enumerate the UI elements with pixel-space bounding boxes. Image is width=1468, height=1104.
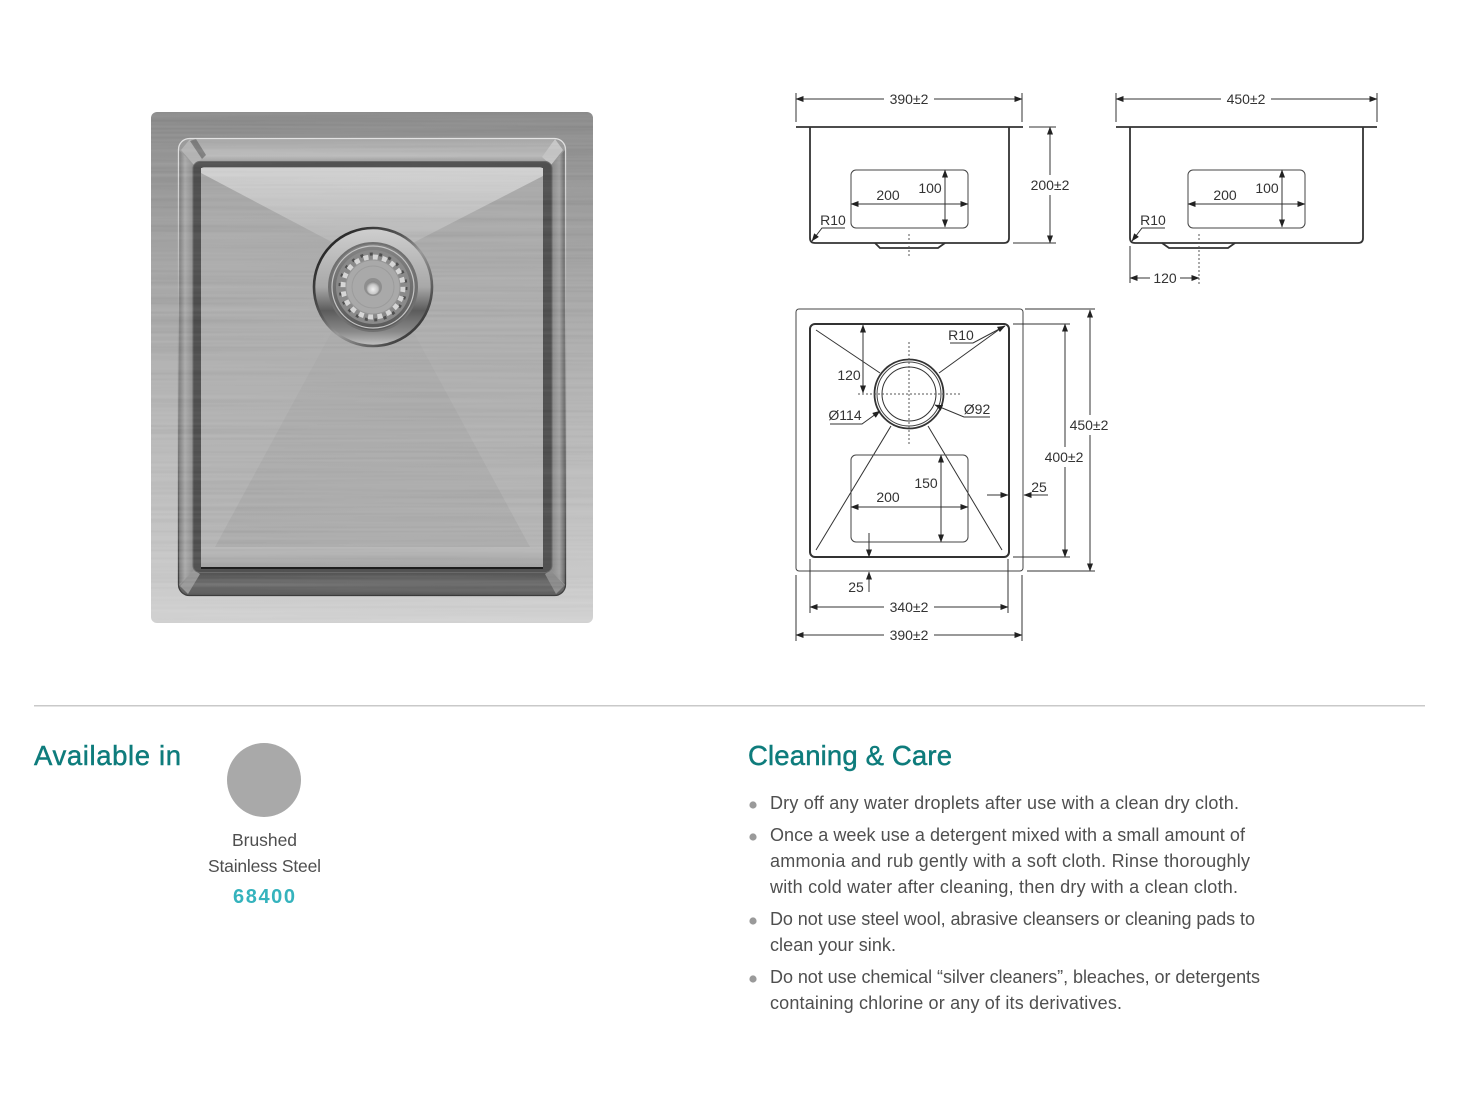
sink bowl sloped walls [178,138,566,596]
flange outline [796,309,1023,571]
rear panel rectangle with dimensions: 100 [918,180,942,196]
length dimension 450 [1025,309,1109,571]
overall width dimension 390: 390±2 [890,627,929,643]
product photo: stainless steel sink top view [151,112,593,623]
bullet 4: Do not use chemical “silver cleaners”, bleaches, or detergents [770,967,1260,987]
bullet 2: with cold water after cleaning, then dry with a clean cloth. [769,877,1238,897]
care instructions list [749,793,1260,1013]
bowl width dimension 340 [810,559,1008,615]
waste outlet [875,243,945,248]
bullet 2: Once a week use a detergent mixed with a small amount of [770,825,1246,845]
technical drawing: plan view [796,309,1109,643]
bullet 2: ammonia and rub gently with a soft cloth. Rinse thoroughly [770,851,1250,871]
brushed steel texture [179,320,194,321]
bowl outline [810,324,1009,557]
swatch name [208,830,321,876]
label diameter 114 [828,407,880,424]
waste outlet [1162,243,1235,248]
offset dimension 120: 120 [1153,270,1177,286]
sink flange [151,112,593,623]
length dimension 450: 450±2 [1070,417,1109,433]
rear panel rectangle with dimensions: 100 [1255,180,1279,196]
product code: 68400 [233,886,295,908]
label diameter 92: Ø92 [964,401,990,417]
sink basin floor with drain falls [193,162,552,572]
right margin 25: 25 [1031,479,1047,495]
R10 corner label [1132,212,1166,241]
R10 corner label: R10 [1140,212,1166,228]
R10 corner label: R10 [820,212,846,228]
height dimension 200: 200±2 [1031,177,1070,193]
technical drawing: side elevation [1116,91,1377,286]
bullet 4: containing chlorine or any of its derivatives. [770,993,1122,1013]
drain offset 120 [837,325,863,393]
finish swatch: brushed stainless steel [208,743,321,908]
sink profile [1116,127,1377,243]
bottom margin 25 [848,533,869,595]
width dimension 450: 450±2 [1227,91,1266,107]
drain circles [858,342,961,445]
label R10 [948,326,1005,343]
rear panel rectangle with dimensions [1188,170,1305,228]
height dimension 200 [1013,127,1070,243]
right margin 25 [987,479,1048,495]
technical drawing: front elevation [796,91,1070,258]
divider [34,705,1425,706]
bullet 3: clean your sink. [770,935,896,955]
lower panel rectangle with dimensions [851,455,968,542]
swatch disc [227,743,301,817]
heading: available in: Available in [34,740,181,771]
drain and strainer basket [314,228,432,346]
rear panel rectangle with dimensions [851,170,968,228]
rear panel rectangle with dimensions: 200 [876,187,900,203]
heading: cleaning and care: Cleaning & Care [748,740,952,771]
bullet 3: Do not use steel wool, abrasive cleansers or cleaning pads to [770,909,1255,929]
label diameter 92 [935,401,990,417]
overall width dimension 390 [796,575,1022,643]
bullet 1: Dry off any water droplets after use with a clean dry cloth. [770,793,1239,813]
drain offset 120: 120 [837,367,861,383]
label R10: R10 [948,327,974,343]
R10 corner label [812,212,846,241]
bullet 4 [749,967,1260,1013]
bowl width dimension 340: 340±2 [890,599,929,615]
sink profile [796,127,1023,243]
swatch name: Brushed [232,830,297,850]
bullet 2 [749,825,1250,897]
rear panel rectangle with dimensions: 200 [1213,187,1237,203]
bowl length dimension 400 [1013,324,1084,557]
offset dimension 120 [1130,246,1199,286]
lower panel rectangle with dimensions: 150 [914,475,938,491]
bottom margin 25: 25 [848,579,864,595]
swatch name: Stainless Steel [208,856,321,876]
width dimension 390: 390±2 [890,91,929,107]
label diameter 114: Ø114 [828,407,862,423]
floor fall lines [816,326,1004,550]
bullet 3 [749,909,1255,955]
bowl length dimension 400: 400±2 [1045,449,1084,465]
lower panel rectangle with dimensions: 200 [876,489,900,505]
